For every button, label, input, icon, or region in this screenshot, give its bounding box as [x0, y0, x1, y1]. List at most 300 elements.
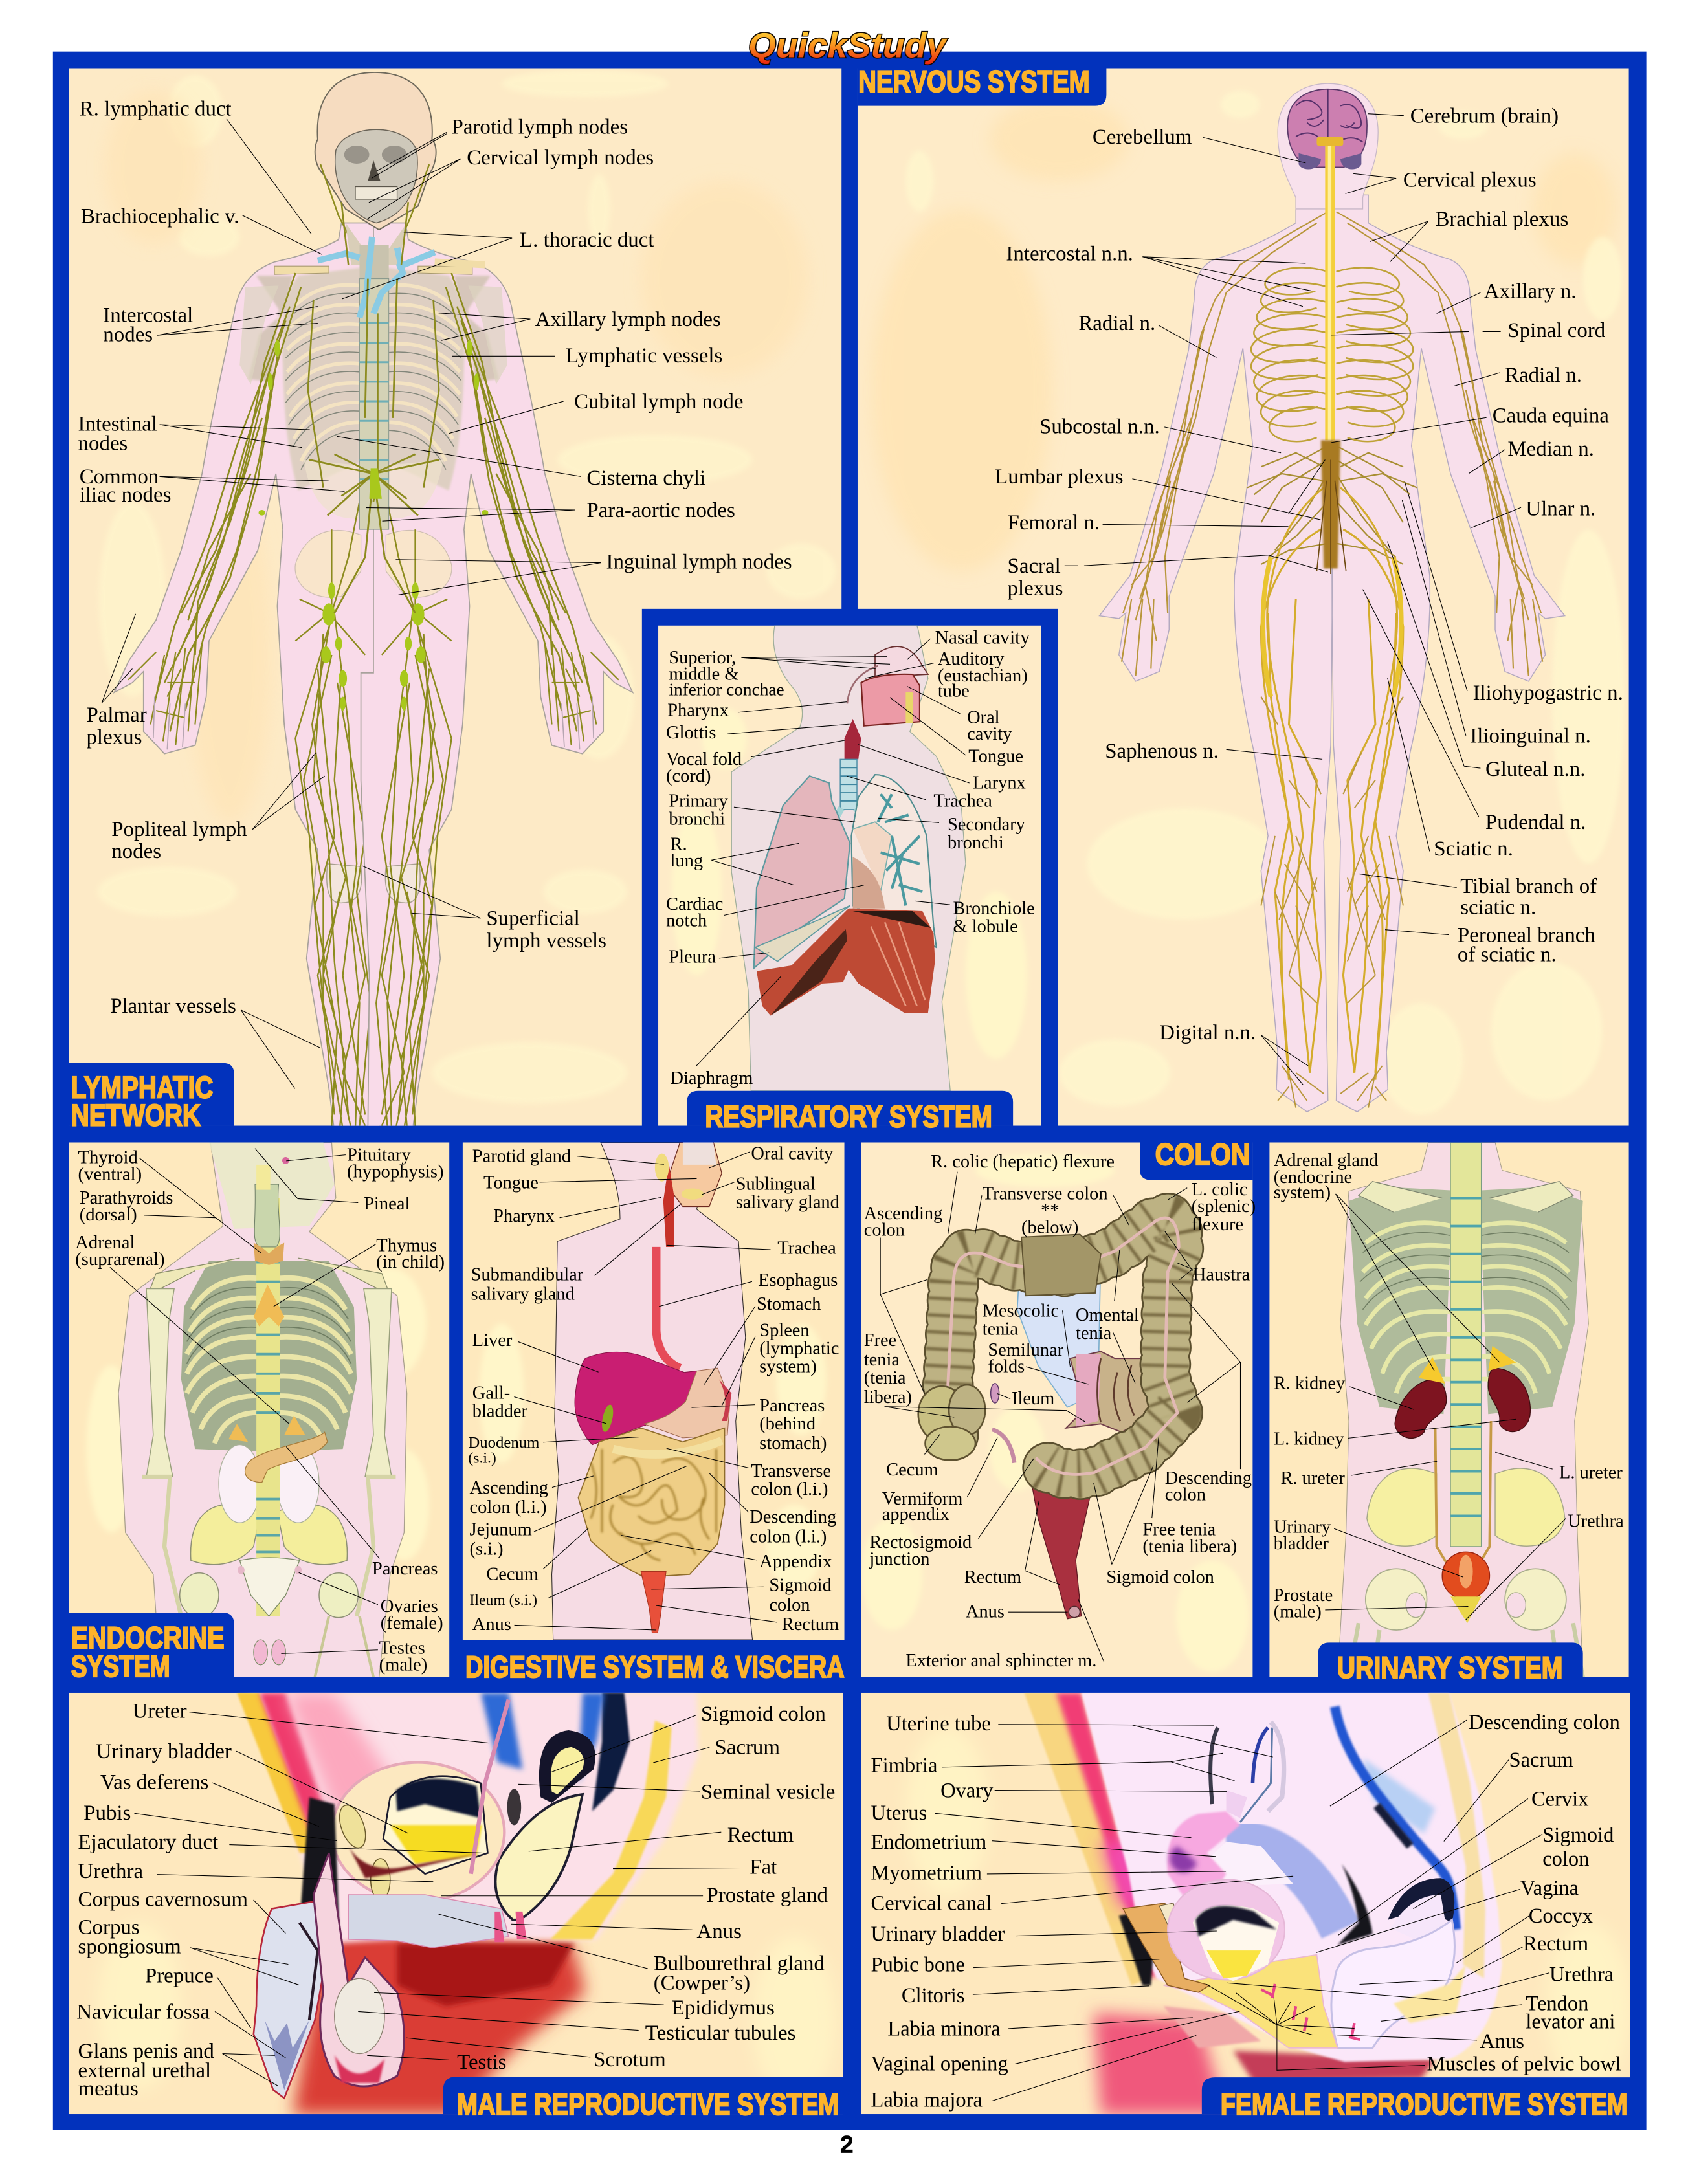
figure: rectum — [495, 1794, 583, 1920]
labels: endocrine: (suprarenal) — [75, 1249, 165, 1270]
heading: lymphatic network: NETWORK — [71, 1099, 201, 1133]
figure: torso silhouette — [731, 626, 966, 1091]
labels: lymphatic: Lymphatic vessels — [566, 344, 722, 368]
labels: endocrine: Ovaries — [381, 1596, 438, 1616]
labels: lymphatic: Cervical lymph nodes — [467, 146, 654, 170]
labels: nervous: Brachial plexus — [1435, 208, 1568, 231]
labels: female: Pubic bone — [871, 1953, 965, 1976]
labels: respiratory: notch — [666, 911, 707, 931]
labels: male: Rectum — [727, 1824, 794, 1847]
labels: urinary: R. kidney — [1274, 1374, 1346, 1394]
figure: spine — [254, 1165, 280, 1616]
labels: respiratory: bronchi — [669, 810, 725, 830]
figure: head profile — [209, 1142, 335, 1229]
labels: lymphatic: nodes — [111, 840, 161, 863]
labels: female: Uterus — [871, 1802, 927, 1825]
labels: respiratory: & lobule — [953, 916, 1018, 936]
labels: digestive — [468, 1143, 839, 1635]
labels: colon: colon — [864, 1220, 905, 1241]
labels: male: Urinary bladder — [96, 1740, 232, 1763]
labels: digestive: Anus — [472, 1615, 511, 1635]
labels: male: Testis — [457, 2051, 506, 2074]
labels: colon: L. colic — [1192, 1180, 1247, 1200]
labels: lymphatic: nodes — [78, 432, 128, 455]
labels: colon: Anus — [966, 1602, 1005, 1622]
labels: nervous: Radial n. — [1505, 364, 1582, 387]
figure: left side stripes — [1024, 1693, 1184, 1985]
labels: nervous: Radial n. — [1078, 312, 1155, 335]
labels: urinary: Urethra — [1568, 1512, 1624, 1532]
labels: nervous: Spinal cord — [1507, 319, 1606, 342]
figure: endocrine body — [118, 1142, 407, 1677]
labels: respiratory: lung — [671, 851, 703, 871]
labels: nervous: Sciatic n. — [1434, 837, 1513, 861]
labels: colon: Mesocolic — [983, 1301, 1059, 1321]
labels: nervous: Digital n.n. — [1159, 1021, 1256, 1044]
figure: adrenals — [228, 1415, 305, 1442]
panel: female reproductive system — [861, 1693, 1630, 2115]
panel: nervous system — [858, 68, 1629, 1126]
labels: respiratory: Pleura — [669, 947, 716, 967]
heading: lymphatic network — [69, 1063, 234, 1133]
panel: respiratory system frame — [642, 609, 1058, 1127]
figure: skeleton left half — [142, 1258, 269, 1677]
labels: female: Myometrium — [871, 1861, 982, 1884]
labels: male: Ureter — [133, 1700, 187, 1723]
labels: respiratory: middle & — [669, 665, 738, 685]
labels: digestive: Submandibular — [471, 1265, 584, 1285]
heading: endocrine system: SYSTEM — [71, 1649, 170, 1684]
labels: lymphatic: Para-aortic nodes — [586, 499, 735, 522]
labels: lymphatic: Inguinal lymph nodes — [606, 550, 792, 573]
labels: colon: libera) — [864, 1387, 912, 1407]
figure: body tissue — [1082, 1693, 1502, 2062]
figure: rectum — [1331, 1920, 1454, 2048]
labels: male: Epididymus — [672, 1996, 775, 2020]
labels: male: Prepuce — [145, 1965, 214, 1988]
labels: respiratory: Glottis — [666, 723, 716, 743]
figure: ureters — [1435, 1421, 1491, 1567]
labels: colon: Descending — [1165, 1468, 1252, 1488]
labels: digestive: Jejunum — [470, 1520, 532, 1540]
labels: male: Prostate gland — [707, 1884, 828, 1907]
figure: dark lower tissue — [1233, 2051, 1435, 2083]
labels: endocrine: Parathyroids — [80, 1187, 173, 1208]
labels: digestive: Descending — [750, 1507, 836, 1527]
labels: respiratory: Superior, — [669, 648, 736, 668]
labels: colon: Haustra — [1193, 1265, 1250, 1285]
labels: colon: Rectosigmoid — [869, 1532, 972, 1552]
labels: nervous — [995, 104, 1623, 1044]
figure: skeleton right half — [269, 1258, 395, 1677]
figure: sigmoid colon — [539, 1730, 595, 1803]
labels: respiratory: Vocal fold — [666, 749, 742, 769]
labels: digestive: bladder — [472, 1402, 528, 1422]
labels: digestive: Ileum (s.i.) — [470, 1592, 537, 1609]
labels: digestive: Appendix — [759, 1552, 832, 1572]
leader lines: respiratory — [696, 639, 970, 1066]
labels: digestive: Sigmoid — [769, 1576, 832, 1596]
labels: female: Vaginal opening — [871, 2052, 1008, 2075]
labels: lymphatic: Plantar vessels — [110, 995, 236, 1018]
labels: respiratory: cavity — [967, 724, 1012, 744]
labels: male: Anus — [696, 1920, 742, 1943]
labels: male: Corpus cavernosum — [78, 1888, 248, 1911]
labels: female: Coccyx — [1529, 1904, 1593, 1928]
heading: digestive system and viscera: DIGESTIVE SYSTEM & VISCERA — [465, 1650, 845, 1684]
labels: lymphatic: Popliteal lymph — [111, 818, 247, 841]
figure: corpus structures — [348, 1895, 527, 1948]
labels: female: Clitoris — [902, 1984, 964, 2007]
labels: female: Fimbria — [871, 1754, 937, 1778]
labels: endocrine: (ventral) — [78, 1164, 142, 1185]
figure: thyroid — [254, 1242, 284, 1265]
heading: colon — [1140, 1138, 1252, 1180]
figure: left lung with bronchial tree — [851, 775, 937, 947]
labels: colon: Cecum — [886, 1460, 938, 1480]
labels: colon: Omental — [1076, 1305, 1139, 1325]
labels: lymphatic: Parotid lymph nodes — [452, 116, 628, 139]
labels: digestive: Rectum — [782, 1615, 839, 1635]
labels: colon: Sigmoid colon — [1106, 1567, 1214, 1587]
figure: lymphatic body left half — [115, 223, 386, 1131]
panel: lymphatic network — [69, 68, 841, 1131]
figure: head and brain — [1278, 83, 1378, 209]
labels: female: Rectum — [1523, 1932, 1588, 1956]
labels: digestive: Duodenum — [468, 1434, 539, 1451]
labels: colon: folds — [988, 1357, 1025, 1377]
labels: nervous: Subcostal n.n. — [1039, 415, 1160, 439]
figure: red and pink lower band — [1094, 2013, 1227, 2115]
heading: endocrine system: ENDOCRINE — [71, 1621, 225, 1655]
labels: nervous: sciatic n. — [1460, 896, 1536, 919]
labels: female: Uterine tube — [886, 1712, 991, 1736]
figure: pelvis and ovaries — [238, 1558, 302, 1665]
leader lines: lymphatic — [102, 119, 601, 1088]
labels: endocrine: Pancreas — [372, 1558, 438, 1579]
labels: nervous: Peroneal branch — [1458, 923, 1595, 947]
labels: digestive: salivary gland — [736, 1193, 839, 1213]
labels: digestive: system) — [759, 1357, 817, 1377]
labels: respiratory: Bronchiole — [953, 898, 1035, 918]
labels: female: Muscles of pelvic bowl — [1427, 2051, 1621, 2075]
leader lines: digestive — [514, 1152, 777, 1630]
labels: urinary: system) — [1274, 1183, 1331, 1203]
labels: urinary: R. ureter — [1280, 1468, 1345, 1488]
labels: male: Glans penis and — [78, 2040, 214, 2063]
labels: female — [871, 1711, 1621, 2112]
labels: lymphatic: Common — [80, 465, 159, 489]
figure: pubic bone and black region — [1119, 1903, 1210, 1992]
figure: cecum and appendix — [918, 1384, 1014, 1463]
labels: urinary: L. ureter — [1559, 1462, 1623, 1483]
labels: lymphatic: Cubital lymph node — [574, 390, 744, 414]
labels: male: Sacrum — [715, 1736, 780, 1759]
labels: lymphatic: L. thoracic duct — [520, 228, 654, 252]
labels: colon: appendix — [882, 1505, 949, 1525]
leader lines: urinary — [1325, 1194, 1566, 1620]
labels: female: Tendon — [1526, 1992, 1588, 2016]
figure: skull and head — [315, 72, 436, 529]
labels: endocrine: Testes — [379, 1638, 425, 1659]
heading: lymphatic network: LYMPHATIC — [71, 1071, 213, 1105]
labels: endocrine: (female) — [381, 1613, 443, 1633]
labels: respiratory: Trachea — [933, 791, 992, 811]
spinal cord and cauda equina — [1316, 137, 1346, 574]
heading: urinary system: URINARY SYSTEM — [1337, 1651, 1562, 1685]
labels: nervous: Intercostal n.n. — [1006, 243, 1133, 266]
figure: back stripes — [1335, 1693, 1485, 1978]
labels: colon — [864, 1152, 1256, 1671]
labels: colon: flexure — [1192, 1215, 1243, 1235]
page number: 2 — [840, 2131, 854, 2157]
figure: torso silhouette — [552, 1142, 753, 1640]
labels: lymphatic: R. lymphatic duct — [80, 98, 232, 121]
figure: skeleton right half — [1466, 1182, 1583, 1677]
labels: colon: tenia — [864, 1350, 900, 1370]
figure: seminal vesicle — [507, 1789, 521, 1825]
labels: urinary: (endocrine — [1274, 1167, 1352, 1187]
panel: urinary system — [1269, 1142, 1629, 1677]
labels: lymphatic: plexus — [86, 726, 142, 749]
labels: male: Scrotum — [594, 2048, 666, 2071]
labels: digestive: colon (l.i.) — [470, 1497, 547, 1517]
labels: digestive: Oral cavity — [751, 1143, 834, 1164]
figure: bladder and prostate — [1442, 1552, 1489, 1623]
labels: urinary: Prostate — [1274, 1585, 1333, 1605]
figure: bladder — [331, 1700, 509, 1902]
figure: diaphragm — [757, 909, 935, 1016]
labels: urinary: (male) — [1274, 1602, 1322, 1622]
labels: digestive: Esophagus — [758, 1270, 838, 1290]
labels: digestive: Spleen — [759, 1321, 810, 1341]
labels: respiratory: Cardiac — [666, 894, 723, 914]
labels: colon: tenia — [1076, 1323, 1112, 1343]
labels: digestive: Sublingual — [736, 1175, 816, 1195]
labels: colon: Transverse colon — [983, 1184, 1108, 1204]
labels: digestive: Trachea — [777, 1239, 836, 1259]
labels: colon: Rectum — [964, 1567, 1021, 1587]
labels: colon: (tenia libera) — [1142, 1536, 1237, 1556]
figure: esophagus — [656, 1247, 680, 1368]
labels: digestive: (behind — [759, 1414, 816, 1434]
leader lines: colon — [880, 1172, 1240, 1662]
labels: nervous: Lumbar plexus — [995, 465, 1124, 489]
figure: bladder — [1168, 1879, 1285, 1981]
labels: digestive: colon (l.i.) — [751, 1479, 828, 1499]
labels: urinary: Urinary — [1274, 1517, 1331, 1537]
labels: nervous: Axillary n. — [1484, 280, 1576, 303]
labels: respiratory: inferior conchae — [669, 679, 784, 699]
figure: lymphatic body right half — [361, 223, 632, 1131]
labels: lymphatic: Cisterna chyli — [586, 467, 705, 490]
figure: sigmoid colon — [1388, 1878, 1454, 1942]
labels: digestive: Parotid gland — [472, 1147, 571, 1167]
figure: head cavity — [655, 1142, 722, 1247]
labels: digestive: Pancreas — [759, 1396, 825, 1416]
figure: rectum — [641, 1572, 666, 1633]
labels: endocrine: (in child) — [376, 1252, 445, 1272]
labels: nervous: Tibial branch of — [1460, 875, 1597, 898]
labels: nervous: Iliohypogastric n. — [1473, 681, 1623, 705]
labels: digestive: (lymphatic — [759, 1339, 839, 1359]
figure: mesentery — [1017, 1235, 1101, 1407]
labels: digestive: salivary gland — [471, 1285, 575, 1305]
labels: nervous: Gluteal n.n. — [1485, 758, 1585, 781]
labels: nervous: Pudendal n. — [1485, 811, 1586, 834]
labels: colon: junction — [869, 1549, 930, 1569]
figure: nervous body right half — [1332, 195, 1565, 1112]
labels: male: Testicular tubules — [645, 2022, 795, 2045]
labels: male: Bulbourethral gland — [654, 1952, 825, 1975]
figure: spine — [1450, 1142, 1482, 1547]
labels: endocrine: (hypophysis) — [347, 1161, 444, 1182]
labels: endocrine — [75, 1144, 445, 1675]
labels: lymphatic: nodes — [103, 323, 153, 346]
labels: nervous: Cauda equina — [1493, 404, 1609, 427]
leader lines: endocrine — [110, 1149, 379, 1653]
labels: respiratory: R. — [671, 834, 687, 854]
labels: nervous: Ilioinguinal n. — [1470, 725, 1591, 748]
labels: lymphatic: Intercostal — [103, 303, 193, 327]
figure: penis section — [254, 1901, 328, 2098]
figure: nervous body left half — [1100, 195, 1332, 1112]
heading: male reproductive system — [443, 2077, 843, 2122]
labels: digestive: colon (l.i.) — [750, 1527, 827, 1547]
figure: stomach and spleen — [644, 1368, 731, 1438]
labels: lymphatic: Palmar — [86, 703, 147, 727]
labels: endocrine: Thymus — [376, 1235, 437, 1255]
labels: male: (Cowper’s) — [654, 1971, 750, 1994]
labels: female: Sacrum — [1509, 1748, 1573, 1772]
figure: dark strip and pubis — [300, 1797, 481, 1992]
figure: intestines — [578, 1428, 724, 1577]
labels: male: Ejaculatory duct — [78, 1831, 218, 1854]
labels: digestive: stomach) — [759, 1433, 827, 1453]
labels: endocrine: Pineal — [364, 1193, 410, 1214]
labels: respiratory: Nasal cavity — [935, 628, 1030, 648]
figure: blue and black dorsal structures — [481, 1693, 630, 1811]
figure: rectum — [1028, 1466, 1094, 1619]
labels: respiratory: bronchi — [948, 833, 1004, 853]
labels: urinary: L. kidney — [1274, 1429, 1344, 1450]
labels: digestive: Ascending — [470, 1478, 548, 1498]
heading: endocrine system — [69, 1613, 234, 1684]
labels: respiratory: Primary — [669, 791, 729, 811]
figure: red pelvic floor — [293, 1923, 585, 2115]
labels: colon: R. colic (hepatic) flexure — [931, 1152, 1115, 1172]
leader lines: male — [135, 1712, 742, 2086]
panel: respiratory system — [658, 626, 1041, 1126]
labels: colon: Ileum — [1012, 1389, 1054, 1409]
labels: urinary: bladder — [1274, 1534, 1329, 1554]
heading: urinary system — [1318, 1642, 1583, 1685]
leader lines: female — [935, 1720, 1549, 2101]
labels: digestive: (s.i.) — [468, 1450, 496, 1467]
labels: male — [76, 1700, 835, 2101]
labels: respiratory: Auditory — [938, 649, 1005, 669]
figure: transverse colon overlay — [1021, 1235, 1101, 1296]
labels: respiratory: Larynx — [973, 773, 1026, 793]
labels: colon: Ascending — [864, 1204, 942, 1224]
labels: endocrine: Adrenal — [75, 1232, 135, 1253]
labels: male: Fat — [750, 1856, 777, 1879]
labels: female: Descending colon — [1469, 1711, 1620, 1734]
labels: female: colon — [1542, 1848, 1589, 1871]
labels: colon: ** — [1041, 1201, 1060, 1221]
labels: respiratory: Secondary — [948, 815, 1026, 835]
heading: colon: COLON — [1155, 1138, 1250, 1172]
figure: left stripes — [237, 1693, 404, 1853]
labels: female: Labia minora — [887, 2017, 1001, 2040]
figure: pancreas — [245, 1432, 328, 1483]
labels: digestive: Liver — [472, 1330, 513, 1351]
heading: respiratory system — [687, 1091, 1013, 1134]
labels: nervous: Ulnar n. — [1526, 498, 1595, 521]
figure: gallbladder — [600, 1404, 615, 1433]
labels: lymphatic: iliac nodes — [80, 483, 171, 507]
labels: female: Anus — [1480, 2030, 1524, 2053]
labels: respiratory: Tongue — [968, 747, 1023, 767]
figure: kidneys and adrenal glands — [1395, 1346, 1530, 1438]
labels: male: external urethal — [78, 2059, 211, 2082]
labels: endocrine: (dorsal) — [80, 1204, 137, 1225]
labels: nervous: Saphenous n. — [1105, 740, 1219, 763]
panel: endocrine system — [69, 1142, 449, 1677]
labels: endocrine: Pituitary — [347, 1144, 411, 1165]
labels: female: Cervix — [1531, 1787, 1588, 1811]
labels: digestive: Pharynx — [493, 1206, 555, 1226]
labels: colon: (tenia — [864, 1368, 906, 1388]
heading: nervous system: NERVOUS SYSTEM — [858, 65, 1090, 99]
labels: colon: (splenic) — [1192, 1197, 1256, 1217]
labels: male: Corpus — [78, 1915, 140, 1939]
labels: lymphatic: Axillary lymph nodes — [535, 308, 721, 331]
leader lines: nervous — [1065, 114, 1521, 1085]
heading: female reproductive system — [1202, 2077, 1630, 2122]
figure: pelvic muscle and fat layer — [1164, 1955, 1466, 2048]
labels: respiratory: (eustachian) — [938, 666, 1028, 686]
panel: colon — [861, 1142, 1252, 1677]
labels: respiratory: Pharynx — [667, 701, 729, 721]
figure: right lung — [754, 776, 850, 968]
figure: sacrum and fat stripe — [550, 1721, 672, 1939]
labels: female: Labia majora — [871, 2088, 983, 2112]
labels: female: Urinary bladder — [871, 1923, 1005, 1946]
figure: colon tube — [948, 1218, 1179, 1474]
figure: vagina and black canal — [1338, 1864, 1373, 1945]
labels: lymphatic — [78, 98, 792, 1018]
labels: digestive: Tongue — [483, 1173, 539, 1193]
labels: female: Vagina — [1520, 1877, 1579, 1900]
labels: respiratory: (cord) — [666, 766, 711, 786]
labels: male: Seminal vesicle — [701, 1780, 835, 1803]
figure: trachea and bronchi — [833, 759, 875, 826]
labels: colon: Semilunar — [988, 1340, 1064, 1360]
labels: colon: Vermiform — [882, 1489, 962, 1509]
labels: respiratory: Diaphragm — [671, 1068, 753, 1088]
labels: male: Urethra — [78, 1860, 143, 1883]
logo: QuickStudy: QuickStudy — [748, 26, 948, 65]
labels: male: Sigmoid colon — [701, 1703, 826, 1726]
labels: nervous: Cervical plexus — [1403, 168, 1537, 192]
labels: female: Cervical canal — [871, 1892, 992, 1915]
figure: nasal and oral cavities — [845, 646, 928, 759]
labels: male: Navicular fossa — [76, 2001, 210, 2024]
labels: male: spongiosum — [78, 1935, 181, 1958]
labels: digestive: (s.i.) — [470, 1539, 504, 1560]
labels: male: Pubis — [83, 1802, 131, 1825]
